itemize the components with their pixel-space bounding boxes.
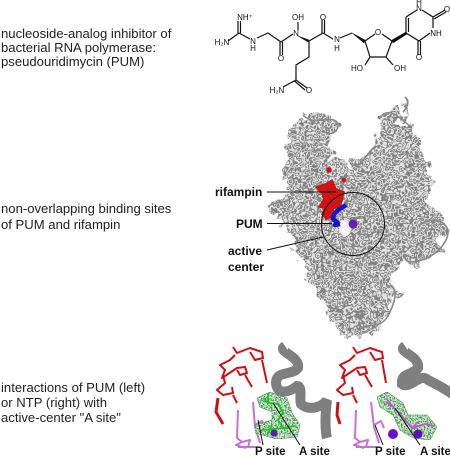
panel: NTP in active center	[337, 346, 450, 456]
chemical structure: pseudouridimycin: H₂N	[215, 38, 230, 47]
metal ion	[348, 220, 358, 228]
helix	[276, 346, 327, 438]
label: active center: center	[228, 260, 264, 274]
chemical structure: pseudouridimycin: NH⁺	[237, 13, 253, 22]
label: rifampin: rifampin	[215, 185, 262, 199]
text: interactions description: or NTP (right) with	[1, 395, 107, 410]
text: interactions description: interactions of PUM (left)	[1, 380, 145, 395]
text: PUM description: pseudouridimycin (PUM)	[1, 54, 144, 69]
protein tangle	[268, 100, 448, 337]
leader lines	[375, 408, 420, 445]
chemical structure: pseudouridimycin: N	[334, 35, 340, 44]
violet nucleotides	[354, 402, 384, 448]
panel: PUM in active center	[216, 346, 330, 456]
chemical structure: pseudouridimycin: HO	[351, 64, 363, 73]
chemical structure: pseudouridimycin: N	[250, 37, 256, 46]
active center circle	[322, 192, 384, 256]
chemical structure: pseudouridimycin	[215, 0, 450, 95]
chemical structure: pseudouridimycin: O	[278, 54, 284, 63]
chemical structure: pseudouridimycin: O	[444, 5, 450, 14]
chemical structure: pseudouridimycin: OH	[292, 13, 304, 22]
chemical structure: pseudouridimycin: O	[416, 53, 422, 62]
chemical structure: pseudouridimycin: H	[250, 44, 256, 53]
green ligand	[262, 393, 295, 434]
text: interactions description: active-center "A site"	[1, 410, 121, 425]
text: PUM description: bacterial RNA polymerase:	[1, 40, 156, 55]
label: rifampin	[215, 185, 336, 199]
label: PUM: PUM	[236, 217, 263, 231]
chemical structure: pseudouridimycin: H	[334, 44, 340, 53]
chemical structure: pseudouridimycin: O	[375, 28, 381, 37]
leader lines	[258, 403, 300, 445]
protein loop strands	[268, 97, 448, 330]
red nucleotides	[337, 347, 386, 424]
red nucleotides	[216, 347, 267, 424]
label: PUM	[236, 217, 332, 231]
PUM	[333, 205, 346, 225]
green density mesh	[377, 392, 437, 440]
chemical structure: pseudouridimycin: NH	[430, 29, 442, 38]
protein structure: RNA polymerase	[215, 97, 448, 337]
label: active center: active	[228, 244, 262, 258]
text: binding sites description: of PUM and rifampin	[1, 217, 120, 232]
text: PUM description: nucleoside-analog inhibitor of	[1, 26, 171, 41]
label: active center	[228, 237, 323, 274]
violet nucleotides	[236, 402, 266, 448]
chemical structure: pseudouridimycin: H₂N	[270, 86, 285, 95]
helix	[402, 346, 450, 396]
pocket highlight	[339, 220, 351, 236]
chemical structure: pseudouridimycin: O	[306, 86, 312, 95]
chemical structure: pseudouridimycin: N	[293, 29, 299, 38]
chemical structure: pseudouridimycin: OH	[394, 64, 406, 73]
chemical structure: pseudouridimycin: O	[320, 13, 326, 22]
text: binding sites description: non-overlapping binding sites	[1, 201, 171, 216]
violet ligand	[386, 398, 434, 428]
metal ion P	[388, 429, 398, 439]
green density mesh	[255, 392, 300, 439]
rifampin	[316, 168, 346, 219]
chemical structure: pseudouridimycin: N	[416, 4, 422, 13]
metal ion A	[414, 430, 422, 438]
metal ion	[270, 430, 278, 436]
